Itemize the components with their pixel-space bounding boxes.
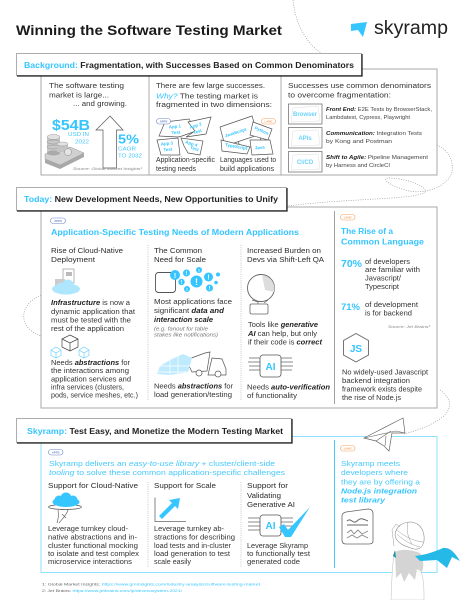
text: few large successes (156, 83, 272, 109)
column: shift-left: Devs via Shift-Left QA (247, 257, 324, 264)
diagram: application tiles: Test (171, 130, 181, 135)
column: scale: Most applications face (154, 299, 232, 306)
column: common language: 71% (341, 302, 360, 312)
arrow: growth (96, 116, 123, 168)
item: browser: Front End: E2E Tests by BrowserStack, (326, 107, 432, 113)
icon: paper plane (364, 418, 405, 451)
column: scale: Need for Scale (154, 257, 206, 264)
column: cloud-native: Infrastructure is now a (51, 300, 130, 307)
text: few large successes: There are few large successes. (156, 83, 265, 90)
column: common language: of development (365, 302, 418, 309)
column: shift-left: AI can help, but only (247, 331, 318, 338)
diagram: language tiles: LANG (265, 120, 272, 124)
column: scale: significant data and (154, 308, 225, 315)
column: cloud-native: Needs abstractions for (51, 360, 131, 367)
text: market is large (49, 83, 127, 108)
icon: JS hexagon (344, 334, 368, 362)
stat: 5% CAGR: TO 2032 (118, 154, 142, 160)
column: cloud-native: the interactions among (51, 368, 129, 375)
column: shift-left: if their code is correct (248, 340, 323, 346)
banner: today: Today: New Development Needs, New Opportunities to Unify (24, 195, 279, 204)
diagram: application tiles: APPS (160, 120, 167, 124)
footnotes: 1: Global Market Insights: https://www.gminsights.com/industry-analysis/software-testing-market (42, 582, 261, 586)
diagram: application tiles: App 3 (161, 140, 174, 147)
item: browser (288, 104, 432, 124)
column: support for cloud-native: cluster functional mocking (48, 543, 138, 550)
heading: application-specific needs: Application-Specific Testing Needs of Modern Applications (51, 228, 300, 237)
diagram: application tiles (156, 117, 211, 155)
icon: AI chip (248, 355, 293, 377)
text: market is large: The software testing (49, 83, 124, 90)
column: support for scale: stractions for describing (154, 534, 235, 542)
column: scale: (e.g. fanout for table (154, 326, 208, 332)
caption: languages: Languages used to (220, 157, 276, 164)
intro text: Skyramp delivers an easy-to-use library + cluster/client-side (49, 459, 275, 468)
tag: lang: LANG (344, 447, 352, 451)
column: cloud-native: application services and (51, 376, 131, 384)
column: shift-left (247, 248, 330, 400)
tag: lang (340, 214, 355, 220)
item: APIs (288, 128, 422, 148)
column: common language: No widely-used Javascript (342, 370, 428, 376)
column: support for cloud-native: Leverage turnkey cloud- (48, 526, 129, 533)
stat: $54B (52, 117, 90, 146)
column: common language: framework exists despite (342, 386, 422, 394)
panel: skyramp (41, 436, 437, 572)
text: market is large: market is large... (49, 92, 109, 100)
caption: languages: build applications (220, 166, 275, 173)
stat: 5% CAGR: 5% (118, 132, 139, 146)
stat: 5% CAGR: CAGR (118, 146, 136, 152)
column: support for scale: Support for Scale (154, 483, 216, 490)
column: common language: the rise of Node.js (342, 395, 402, 402)
column: common language: of developers (365, 259, 411, 266)
banner: background (16, 54, 362, 76)
illustration: developer with scarf (391, 522, 460, 600)
tag: apps (50, 218, 66, 224)
column: support for generative AI (247, 483, 310, 566)
footnotes (42, 582, 261, 593)
column: Node.js library: they are by offering a (341, 478, 421, 486)
item: APIs: APIs (298, 136, 312, 142)
column: cloud-native: Rise of Cloud-Native (51, 248, 123, 255)
tag: apps (48, 450, 63, 455)
column: support for scale: load tests and in-cluster (154, 543, 232, 550)
diagram: language tiles: TypeScript (225, 142, 248, 151)
icon: dump truck with blocks (157, 352, 226, 377)
column: support for cloud-native: microservice interactions (48, 559, 133, 566)
column: support for generative AI: to functionally test (247, 551, 310, 558)
column: shift-left: Tools like generative (248, 322, 318, 329)
caption: languages (220, 157, 276, 173)
column: common language: Typescript (365, 284, 399, 291)
icon: coins and cash (45, 134, 84, 169)
column: shift-left: Needs auto-verification (247, 384, 330, 392)
column: common language: is for backend (365, 310, 412, 318)
column: cloud-native (51, 248, 138, 400)
column: support for cloud-native: Support for Cloud-Native (48, 483, 138, 490)
column: Node.js library: developers where (341, 468, 408, 477)
diagram: language tiles (220, 116, 276, 155)
item: CI/CD (288, 152, 428, 172)
item: CI/CD: Shift to Agile: Pipeline Management (326, 155, 428, 161)
column: cloud-native: dynamic application that (51, 309, 135, 316)
column: scale: Needs abstractions for (154, 384, 234, 390)
icon: box with alert bubbles: ! (195, 277, 198, 287)
stat: 5% CAGR (118, 132, 142, 160)
banner: today (16, 188, 287, 211)
column: Node.js library: Skyramp meets (341, 459, 400, 468)
tag: apps: APPS (52, 451, 60, 455)
item: APIs: by Kong and Postman (326, 139, 392, 145)
column: cloud-native: rest of the application (51, 326, 124, 333)
icon: box with alert bubbles: ! (207, 274, 210, 282)
column: common language: 70% (341, 259, 362, 270)
banner: background: Background: Fragmentation, with Successes Based on Common Denominators (24, 61, 355, 70)
column: common language: are familiar with (365, 267, 420, 274)
column: support for scale: Leverage turnkey ab- (154, 526, 225, 533)
column: support for scale (154, 483, 235, 566)
item: browser: Lambdatest, Cypress, Playwright (326, 115, 410, 121)
column: scale: The Common (154, 248, 202, 255)
diagram: application tiles: Test (190, 145, 200, 152)
text: common denominators: Successes use common denominators (288, 83, 432, 90)
panel: background (41, 69, 437, 175)
column: cloud-native: infra services (clusters, (51, 384, 124, 392)
footnotes: 2: Jet Brains: https://www.jetbrains.com/lp/devecosystem-2021/ (42, 588, 183, 593)
caption: application-specific: Application-specific (156, 157, 215, 164)
column: cloud-native: pods, service meshes, etc.) (51, 392, 138, 400)
diagram: language tiles: Java (255, 145, 266, 150)
icon: AI chip: AI (266, 362, 276, 373)
item: CI/CD: CI/CD (297, 160, 314, 166)
icon: JS hexagon: JS (350, 344, 362, 355)
banner: skyramp (16, 418, 292, 443)
text: few large successes: fragmented in two dimensions: (156, 102, 272, 109)
column: support for cloud-native: to isolate and test complex (48, 551, 140, 558)
column: support for generative AI: Support for (247, 483, 289, 490)
intro text: tooling to solve these common application-specific challenges (49, 468, 285, 477)
logo: skyramp: skyramp (374, 18, 448, 39)
source note: Source: Global Market Insights¹ (73, 166, 143, 171)
column: support for cloud-native: native abstractions and in- (48, 534, 138, 542)
tag: lang: LANG (344, 216, 352, 220)
column: shift-left: of functionality (247, 393, 298, 400)
column: support for scale: load generation to test (154, 551, 230, 558)
column: scale: interaction scale (154, 317, 213, 324)
caption: application-specific: testing needs (156, 166, 196, 173)
item: APIs: Communication: Integration Tests (326, 131, 422, 137)
column: common language: backend integration (342, 378, 410, 385)
icon: cubes (51, 335, 89, 358)
column: common language: The Rise of a (341, 227, 394, 236)
column: Node.js library: Node.js integration (341, 486, 417, 496)
column: support for generative AI: Leverage Skyramp (247, 543, 308, 550)
icon: box with alert bubbles: ! (186, 271, 188, 277)
column: scale: stakes like notifications) (154, 332, 218, 338)
column: Node.js library: test library (341, 496, 386, 504)
banner: skyramp: Skyramp: Test Easy, and Monetize the Modern Testing Market (27, 427, 283, 436)
icon: AI chip with check: AI (266, 521, 276, 532)
column: cloud-native: Deployment (51, 257, 95, 264)
diagram: application tiles: App 1 (169, 123, 182, 130)
tag: apps: APPS (54, 219, 62, 223)
diagram: application tiles: App 2 (189, 121, 203, 130)
item: CI/CD: by Harness and CircleCI (326, 163, 390, 169)
icon: box with alert bubbles: ! (209, 286, 211, 292)
icon: head with laptop (248, 274, 274, 314)
column: scale (154, 248, 234, 399)
caption: application-specific (156, 157, 215, 173)
diagram: application tiles: App 4 (185, 139, 199, 148)
column: shift-left: Increased Burden on (247, 248, 321, 255)
diagram: language tiles: Python (254, 125, 270, 136)
icon: rising arrow chart (155, 498, 186, 522)
intro text (49, 459, 285, 477)
column: scale: load generation/testing (154, 392, 232, 399)
column: support for generative AI: generated code (247, 559, 300, 566)
diagram: language tiles: JavaScript (224, 127, 247, 138)
stat: $54B: $54B (52, 117, 90, 134)
title: Winning the Software Testing Market (16, 22, 282, 38)
stat: $54B: 2022 (75, 140, 89, 146)
column: common language: Common Language (341, 238, 425, 246)
icon: library card (342, 509, 373, 544)
column: support for generative AI: Validating (247, 493, 281, 500)
column: cloud-native: must be tested with the (51, 318, 131, 324)
column: support for scale: scale easily (154, 559, 192, 566)
column: common language: Source: Jet Brains² (388, 324, 431, 329)
icon: box with alert bubbles: ! (198, 268, 200, 273)
icon: floating cloud (48, 492, 82, 523)
stat: $54B: USD IN (68, 132, 89, 138)
panel: today (41, 207, 437, 408)
icon: box with alert bubbles: ! (181, 280, 183, 286)
column: support for cloud-native (48, 483, 140, 566)
icon: box with alert bubbles: ! (186, 287, 188, 292)
icon: box with alert bubbles (156, 267, 220, 292)
column: common language (340, 214, 431, 402)
column: Node.js library (340, 446, 421, 544)
item: browser: Browser (293, 112, 318, 118)
text: common denominators: to overcome fragmentation: (288, 92, 391, 100)
icon: cloud with servers (52, 269, 80, 294)
column: common language: Javascript/ (365, 276, 401, 282)
text: common denominators (288, 83, 432, 100)
icon: box with alert bubbles: ! (174, 271, 176, 280)
diagram: application tiles: Test (163, 147, 173, 152)
column: support for generative AI: Generative AI (247, 502, 295, 509)
text: market is large: ... and growing. (73, 101, 127, 108)
diagram: application tiles: Test (193, 128, 203, 135)
text: few large successes: Why? The testing market is (156, 94, 259, 100)
